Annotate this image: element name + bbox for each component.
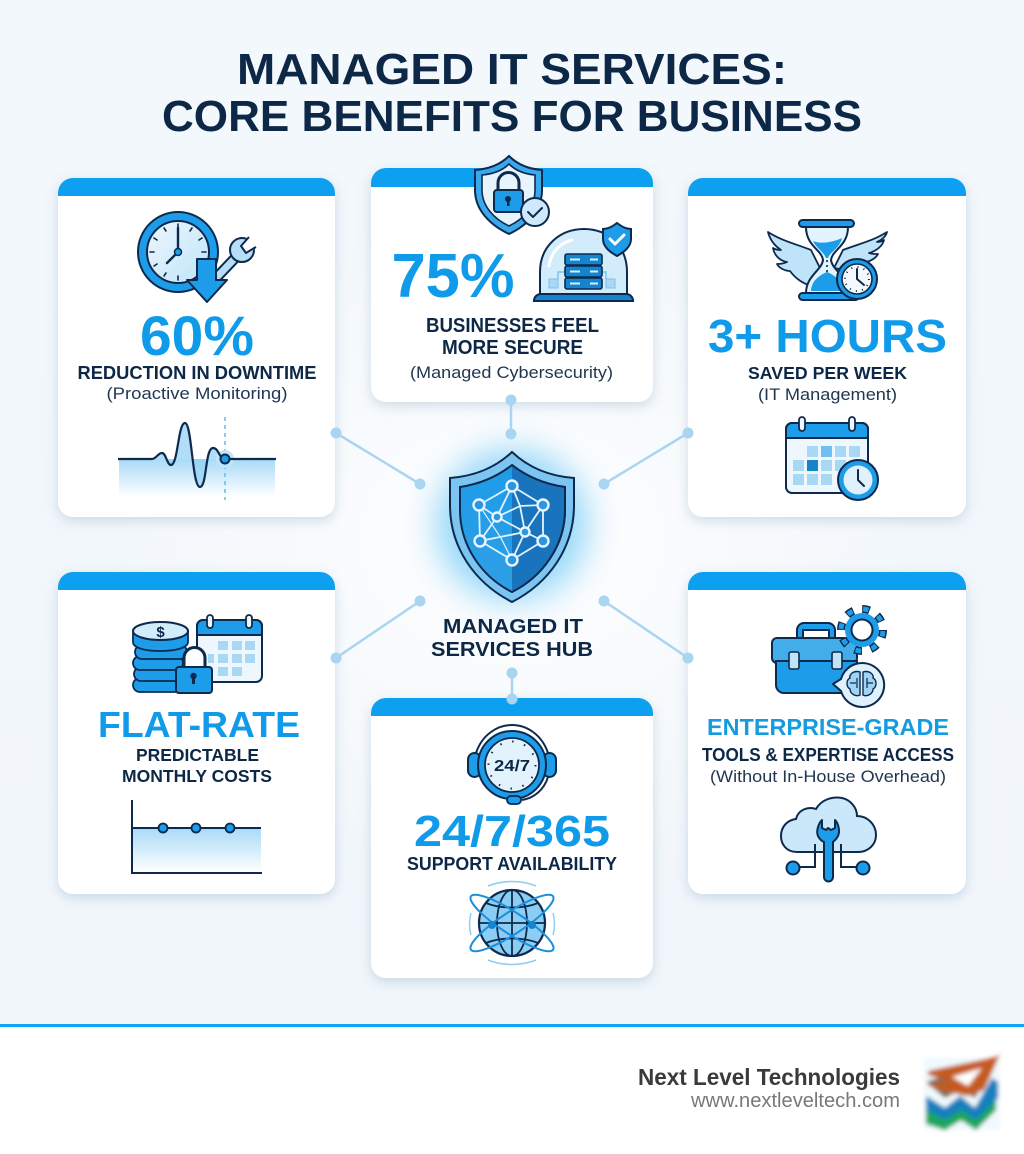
label: businesses feel more secure [426, 315, 599, 359]
label: businesses feel more secure: MORE SECURE [442, 337, 583, 359]
panel: businesses feel more secure [371, 156, 653, 402]
icon: globe with orbits [465, 882, 559, 964]
footer: company name and url: Next Level Technologies [638, 1064, 900, 1090]
icon: coins, calendar and padlock [133, 615, 262, 693]
hub connector lines [330, 394, 694, 704]
footer band [0, 1024, 1024, 1154]
label: saved per week: SAVED PER WEEK [748, 363, 907, 383]
panel: flat-rate predictable costs [58, 572, 335, 894]
panel: reduction in downtime [58, 178, 335, 517]
icon: coins, calendar and padlock: $ [156, 624, 165, 641]
note: proactive monitoring: (Proactive Monitoring) [106, 384, 288, 403]
chart: downtime sparkline [118, 417, 276, 500]
title: CORE BENEFITS FOR BUSINESS [162, 92, 862, 141]
icon: cloud with wrench and nodes [781, 797, 876, 882]
footer: company name and url [638, 1064, 900, 1112]
label: predictable monthly costs: PREDICTABLE [136, 745, 259, 765]
stat: 75%: 75% [392, 242, 514, 311]
icon: shield with padlock [475, 156, 549, 234]
label: support availability: SUPPORT AVAILABILITY [407, 854, 617, 874]
label: reduction in downtime: REDUCTION IN DOWNTIME [78, 363, 316, 383]
note: without in-house overhead: (Without In-House Overhead) [710, 767, 946, 786]
icon: server under dome [534, 223, 633, 301]
icon: headset clock 24/7 [468, 725, 556, 804]
label: tools and expertise access: TOOLS & EXPERTISE ACCESS [702, 745, 954, 765]
title [162, 45, 862, 141]
stat: 3+ hours: 3+ HOURS [708, 310, 947, 362]
panel: hours saved per week [688, 178, 966, 517]
hub: shield with network [412, 425, 612, 625]
hub label [431, 616, 593, 661]
label: businesses feel more secure: BUSINESSES FEEL [426, 315, 599, 337]
stat: 60%: 60% [140, 304, 254, 367]
footer: company name and url: www.nextleveltech.com [690, 1090, 900, 1112]
panel: support availability [371, 698, 653, 978]
icon: calendar with clock [786, 417, 878, 500]
label: predictable monthly costs: MONTHLY COSTS [122, 766, 272, 786]
icon: winged hourglass with clock [768, 220, 887, 300]
hub label: SERVICES HUB [431, 639, 593, 661]
note: managed cybersecurity: (Managed Cybersecurity) [410, 363, 613, 382]
icon: toolbox, gear and brain bubble [772, 609, 884, 707]
stat: flat-rate: FLAT-RATE [98, 704, 300, 745]
hub label: MANAGED IT [443, 616, 583, 638]
stat: enterprise-grade: ENTERPRISE-GRADE [707, 714, 949, 740]
title: MANAGED IT SERVICES: [237, 45, 787, 94]
chart: flat cost line [132, 800, 262, 873]
icon: headset clock 24/7: 24/7 [494, 758, 530, 775]
label: predictable monthly costs [122, 745, 272, 786]
logo: next level technologies [924, 1054, 1000, 1130]
note: it management: (IT Management) [758, 385, 897, 404]
stat: 24/7/365: 24/7/365 [414, 807, 610, 856]
panel: enterprise-grade tools [688, 572, 966, 894]
icon: clock with wrench and down arrow [138, 212, 258, 302]
